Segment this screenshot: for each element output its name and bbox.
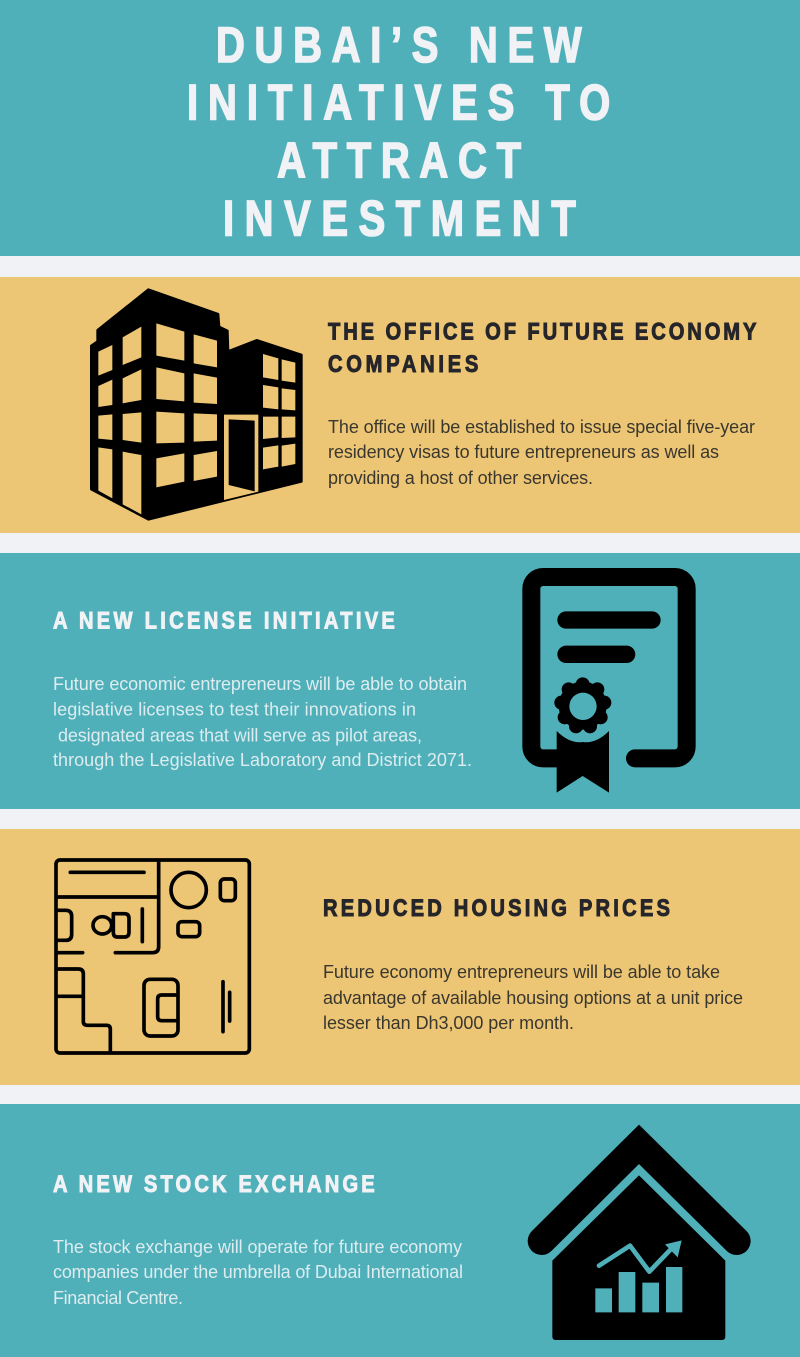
- text block: office description: [328, 417, 755, 488]
- text block: housing description: lesser than Dh3,000 per month.: [323, 1013, 574, 1033]
- text block: license description: [53, 674, 472, 770]
- heading: a new license initiative: A NEW LICENSE INITIATIVE: [53, 607, 395, 634]
- text block: office description: The office will be established to issue special five-year: [328, 417, 755, 437]
- text block: license description: legislative licenses to test their innovations in: [53, 700, 416, 720]
- panel: header: [0, 0, 800, 256]
- text block: stock exchange description: [53, 1237, 463, 1308]
- icon: certificate: [531, 577, 687, 793]
- panel: reduced housing prices: [0, 829, 800, 1085]
- heading: a new stock exchange: A NEW STOCK EXCHANGE: [53, 1170, 375, 1197]
- heading: the office of future economy companies: THE OFFICE OF FUTURE ECONOMY: [328, 318, 757, 345]
- text block: housing description: [323, 962, 743, 1033]
- heading: the office of future economy companies: COMPANIES: [328, 350, 478, 377]
- icon: office building: [91, 289, 302, 520]
- panel: the office of future economy companies: [0, 277, 800, 533]
- title: DUBAI’S NEW: [216, 17, 582, 73]
- panel: a new stock exchange: [0, 1104, 800, 1357]
- text block: license description: designated areas that will serve as pilot areas,: [58, 726, 422, 746]
- text block: office description: residency visas to future entrepreneurs as well as: [328, 442, 719, 462]
- title: INITIATIVES TO: [187, 74, 610, 131]
- text block: housing description: Future economy entrepreneurs will be able to take: [323, 962, 720, 982]
- title: ATTRACT: [277, 132, 521, 188]
- heading: reduced housing prices: REDUCED HOUSING PRICES: [323, 894, 670, 921]
- text block: office description: providing a host of other services.: [328, 468, 593, 488]
- heading: the office of future economy companies: [328, 318, 757, 377]
- icon: floor plan: [56, 860, 249, 1053]
- icon: house with rising chart: [542, 1144, 737, 1340]
- text block: stock exchange description: The stock exchange will operate for future economy: [53, 1237, 462, 1257]
- text block: housing description: advantage of available housing options at a unit price: [323, 988, 743, 1008]
- text block: license description: through the Legislative Laboratory and District 2071.: [53, 750, 472, 770]
- panel: a new license initiative: [0, 553, 800, 809]
- text block: stock exchange description: companies under the umbrella of Dubai International: [53, 1262, 463, 1282]
- title: [187, 17, 610, 246]
- title: INVESTMENT: [223, 190, 576, 246]
- text block: license description: Future economic entrepreneurs will be able to obtain: [53, 674, 467, 694]
- text block: stock exchange description: Financial Centre.: [53, 1288, 183, 1308]
